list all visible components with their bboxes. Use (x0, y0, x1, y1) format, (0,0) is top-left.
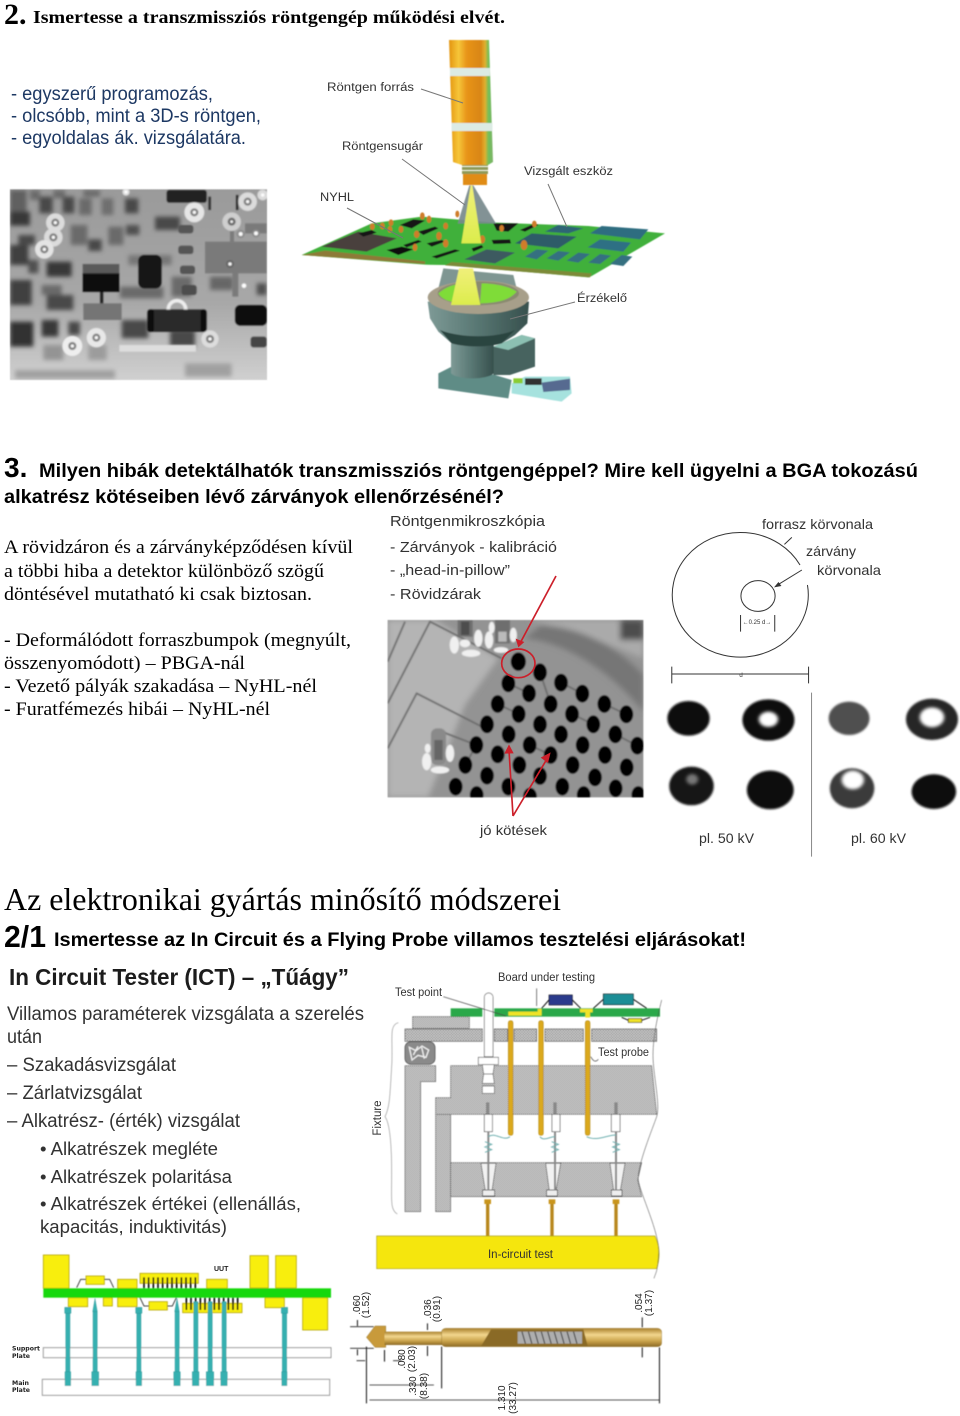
labels and leader lines: x-ray machine: NYHL (320, 192, 355, 204)
yellow components (43, 1255, 328, 1330)
dimension texts: (1.37) (644, 1290, 655, 1316)
text block: defect list: - Furatfémezés hibái – NyHL-nél (4, 699, 270, 720)
labels: bed of nails cross-section: UUT (214, 1266, 229, 1273)
dimension texts: .060 (352, 1295, 363, 1315)
cross-hatched support plate (405, 1029, 657, 1041)
text block: advantages list: - olcsóbb, mint a 3D-s röntgen, (11, 106, 261, 127)
icon: x-ray source tube (449, 40, 493, 185)
labels and leader lines: x-ray machine: Érzékelő (577, 292, 627, 305)
labels and leader lines: x-ray machine: Röntgensugár (342, 141, 423, 153)
diagram: bed of nails cross-section (42, 1255, 331, 1395)
labels: in-circuit test fixture: In-circuit test (488, 1249, 554, 1261)
text block: x-ray microscopy list: - „head-in-pillow” (390, 562, 510, 579)
text block: defect list (4, 630, 351, 720)
heading: question 2/1: 2/1 (4, 919, 46, 954)
teal probes (65, 1298, 288, 1386)
labels and leader lines: x-ray machine: Vizsgált eszköz (524, 166, 613, 178)
title: electronic manufacturing qualification methods: Az elektronikai gyártás minősítő módszerei (4, 881, 561, 917)
dimension texts: (2.03) (407, 1346, 418, 1372)
text block: In Circuit Tester description: • Alkatrészek megléte (40, 1139, 218, 1159)
diagram: solder and void outlines: ←0.25 d→ (743, 620, 771, 626)
panel: circuit board (302, 211, 665, 277)
component pins (77, 1277, 238, 1310)
plates (42, 1348, 331, 1395)
gold probe body (366, 1326, 662, 1347)
diagram: solder and void outlines (672, 516, 881, 683)
dimension texts: .036 (423, 1299, 434, 1319)
dimension texts: .330 (408, 1376, 419, 1396)
diagram: test probe with dimensions (350, 1290, 662, 1414)
voids x-ray samples at 50 and 60 kV (667, 693, 958, 857)
labels: bed of nails cross-section: Plate (12, 1352, 31, 1360)
heading: question 2/1 (4, 919, 746, 954)
dimension texts: (33.27) (508, 1382, 519, 1414)
dimension texts: (0.91) (432, 1296, 443, 1322)
text block: defect list: - Vezető pályák szakadása – NyHL-nél (4, 676, 317, 697)
text block: detector tilt note: a többi hiba a detektor különböző szögű (4, 561, 325, 582)
icon: x-ray cone (458, 185, 496, 224)
labels and leader lines: x-ray machine: Röntgen forrás (327, 82, 414, 94)
voids x-ray samples at 50 and 60 kV: pl. 60 kV (851, 830, 907, 846)
text block: detector tilt note: döntésével mutatható ki csak biztosan. (4, 584, 312, 605)
text block: advantages list (11, 84, 261, 149)
diagram: in-circuit test fixture (377, 988, 662, 1278)
labels: in-circuit test fixture: Board under testing (498, 972, 595, 984)
dimension texts: (1.52) (361, 1292, 372, 1318)
leaders, brace and break line (385, 988, 662, 1278)
text block: In Circuit Tester description: In Circuit Tester (ICT) – „Tűágy” (9, 964, 349, 990)
foam seal (405, 1042, 435, 1064)
labels: bed of nails cross-section: Plate (12, 1386, 31, 1394)
dimension texts: 1.310 (497, 1385, 508, 1411)
text block: detector tilt note (4, 537, 353, 605)
text block: In Circuit Tester description: után (7, 1027, 42, 1048)
dimension texts: (8.38) (419, 1373, 430, 1399)
text block: x-ray microscopy list: Röntgenmikroszkópia (390, 513, 546, 530)
icon: detector (428, 268, 572, 402)
text block: In Circuit Tester description: Villamos paraméterek vizsgálata a szerelés (7, 1004, 364, 1025)
fixture blocks (405, 1017, 657, 1212)
text block: defect list: összenyomódott) – PBGA-nál (4, 653, 245, 674)
dimension texts: .054 (634, 1293, 645, 1313)
diagram: solder and void outlines: zárvány (806, 543, 856, 559)
voids x-ray samples at 50 and 60 kV: pl. 50 kV (699, 830, 755, 846)
text block: advantages list: - egyszerű programozás, (11, 84, 213, 105)
text block: x-ray microscopy list (390, 513, 557, 603)
diagram: solder and void outlines: d (739, 673, 743, 679)
x-ray photo of BGA solder balls (388, 620, 645, 805)
heading: question 2: Ismertesse a transzmissziós röntgengép működési elvét. (33, 7, 505, 27)
heading: question 2/1: Ismertesse az In Circuit és a Flying Probe villamos tesztelési eljárásokat! (54, 930, 746, 951)
receptacles, wires and pins (481, 1102, 625, 1236)
text block: In Circuit Tester description: – Zárlatvizsgálat (7, 1083, 143, 1104)
red circle and arrows on photo: jó kötések (479, 822, 548, 838)
heading: question 3: alkatrész kötéseiben lévő zárványok ellenőrzésénél? (4, 487, 504, 508)
text block: In Circuit Tester description: kapacitás, induktivitás) (40, 1217, 227, 1237)
text block: defect list: - Deformálódott forraszbumpok (megnyúlt, (4, 630, 351, 651)
labels: in-circuit test fixture: Test point (395, 987, 443, 999)
labels: bed of nails cross-section (12, 1266, 229, 1394)
text block: advantages list: - egyoldalas ák. vizsgálatára. (11, 128, 246, 149)
dimension texts: .080 (397, 1349, 408, 1369)
text block: In Circuit Tester description: – Szakadásvizsgálat (7, 1055, 177, 1076)
heading: question 3: 3. (4, 452, 27, 483)
dimension texts (352, 1290, 655, 1414)
labels: in-circuit test fixture: Test probe (598, 1047, 649, 1059)
labels: bed of nails cross-section: Support (12, 1344, 40, 1352)
green board (43, 1288, 331, 1298)
in-circuit test bar (377, 1236, 659, 1269)
text block: x-ray microscopy list: - Zárványok - kalibráció (390, 539, 557, 556)
board under testing (451, 994, 660, 1022)
heading: question 3: Milyen hibák detektálhatók transzmissziós röntgengéppel? Mire kell ügyelni a BGA tokozású (39, 461, 918, 482)
labels: in-circuit test fixture (372, 972, 649, 1261)
diagram: solder and void outlines: forrasz körvonala (762, 516, 873, 532)
x-ray image of circuit board (10, 188, 268, 380)
diagram: transmission x-ray machine (302, 40, 665, 402)
labels: bed of nails cross-section: Main (12, 1379, 29, 1387)
text block: In Circuit Tester description: • Alkatrészek értékei (ellenállás, (40, 1194, 301, 1214)
labels: in-circuit test fixture: Fixture (372, 1100, 384, 1136)
dimension lines (350, 1317, 659, 1403)
labels and leader lines: x-ray machine (320, 82, 627, 319)
text block: In Circuit Tester description: – Alkatrész- (érték) vizsgálat (7, 1111, 241, 1132)
heading: question 2 (4, 0, 505, 31)
test probes (508, 1021, 590, 1135)
icon: lower x-ray beam (451, 268, 480, 305)
text block: x-ray microscopy list: - Rövidzárak (390, 586, 482, 603)
text block: In Circuit Tester description: • Alkatrészek polaritása (40, 1167, 233, 1187)
text block: detector tilt note: A rövidzáron és a zárványképződésen kívül (4, 537, 353, 558)
diagram: solder and void outlines: körvonala (817, 562, 881, 578)
red circle and arrows on photo (479, 576, 556, 838)
text block: In Circuit Tester description (7, 964, 364, 1237)
icon: upper x-ray beam (461, 185, 481, 243)
heading: question 3 (4, 452, 918, 508)
guide pin (478, 993, 498, 1093)
